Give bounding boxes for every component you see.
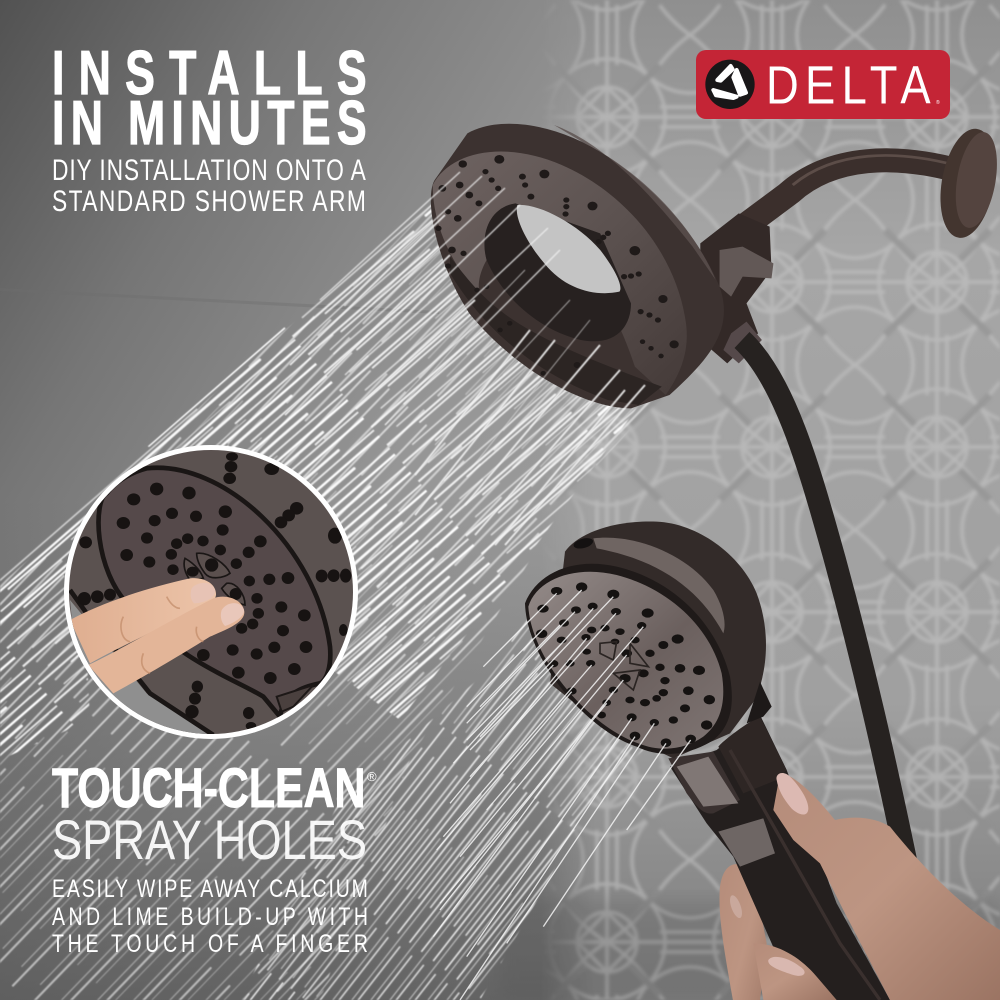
- registered mark: ®: [936, 99, 940, 106]
- shell highlight: [554, 125, 716, 280]
- face plate: [528, 572, 723, 749]
- hose nut: [723, 322, 762, 363]
- spray nozzles: [78, 452, 351, 730]
- control button: [677, 757, 738, 807]
- heading: installs in minutes: IN MINUTES: [52, 89, 367, 158]
- fingers behind handle: [719, 864, 767, 1000]
- logo: Delta: [696, 50, 950, 119]
- logo icon: [705, 60, 755, 109]
- heading: installs in minutes: [52, 39, 367, 218]
- handle metal band: [718, 818, 775, 867]
- description: [52, 875, 368, 958]
- swivel connector: [700, 213, 772, 363]
- spray holes: [435, 155, 679, 376]
- inner opening wall: [484, 203, 631, 341]
- handheld shower head with hand: [433, 522, 1000, 1000]
- head body: [550, 522, 766, 758]
- arm highlight: [793, 155, 954, 185]
- dark bezel lines: [99, 468, 330, 717]
- lower grey area: [70, 600, 208, 734]
- shower arm: [735, 160, 962, 233]
- logo wordmark: DELTA: [766, 55, 931, 115]
- opening showing wall: [517, 205, 620, 293]
- knuckle nail: [728, 894, 744, 920]
- logo background: [696, 50, 950, 119]
- face rim: [525, 564, 732, 754]
- finger nail lower: [221, 603, 244, 626]
- circle ring: [64, 445, 358, 739]
- side knob: [747, 682, 772, 723]
- flexible hose: [742, 340, 906, 860]
- lower finger: [88, 597, 244, 693]
- inset circle: touch-clean close-up: [64, 445, 358, 739]
- description: THE TOUCH OF A FINGER: [52, 930, 368, 958]
- handle: [670, 715, 890, 1000]
- water jets from holes: [433, 590, 691, 1000]
- registered mark: ®: [367, 769, 377, 784]
- handle side plate: [718, 717, 787, 793]
- hand: [773, 773, 1000, 1000]
- subheading: installation: [52, 153, 366, 218]
- side hole: [572, 536, 594, 550]
- fingers: [70, 578, 244, 693]
- knuckle creases: [121, 597, 203, 673]
- upper finger: [70, 578, 216, 663]
- band highlight: [593, 538, 725, 633]
- inner lower rim: [450, 257, 662, 405]
- wall flange: [933, 126, 1000, 241]
- clamp tab: [720, 247, 773, 297]
- heading: touch-clean spray holes: [52, 757, 377, 958]
- finger nail upper: [191, 583, 215, 603]
- subheading: installation: DIY INSTALLATION ONTO A: [52, 153, 366, 187]
- spray holes: [536, 582, 715, 747]
- handle shape: [277, 685, 313, 712]
- bezel lower: [70, 590, 213, 735]
- head back shell: [431, 124, 724, 408]
- face ring: [433, 152, 687, 395]
- overhead shower head with arm: [431, 124, 1000, 408]
- subheading: spray holes: SPRAY HOLES: [52, 808, 367, 871]
- flange inner: [950, 130, 1000, 230]
- subheading: installation: STANDARD SHOWER ARM: [52, 184, 366, 218]
- circle contents: [69, 450, 353, 734]
- thumb nail: [776, 773, 808, 814]
- finger nail: [768, 957, 805, 976]
- overhead spray passing in front of head: [285, 172, 645, 545]
- center holes: [187, 558, 242, 600]
- lower finger: [753, 943, 837, 1000]
- delta logo on face: [600, 642, 648, 690]
- hose on handle: [730, 750, 880, 1000]
- handheld shower spray: [240, 610, 665, 1000]
- description: AND LIME BUILD-UP WITH: [52, 903, 368, 931]
- center spray pads: [184, 553, 245, 605]
- heading: touch-clean spray holes: TOUCH-CLEAN: [52, 757, 366, 820]
- water spray from overhead shower head: [0, 165, 660, 1000]
- control button plate: [668, 752, 740, 814]
- heading: installs in minutes: INSTALLS: [52, 39, 367, 108]
- description: EASILY WIPE AWAY CALCIUM: [52, 875, 368, 903]
